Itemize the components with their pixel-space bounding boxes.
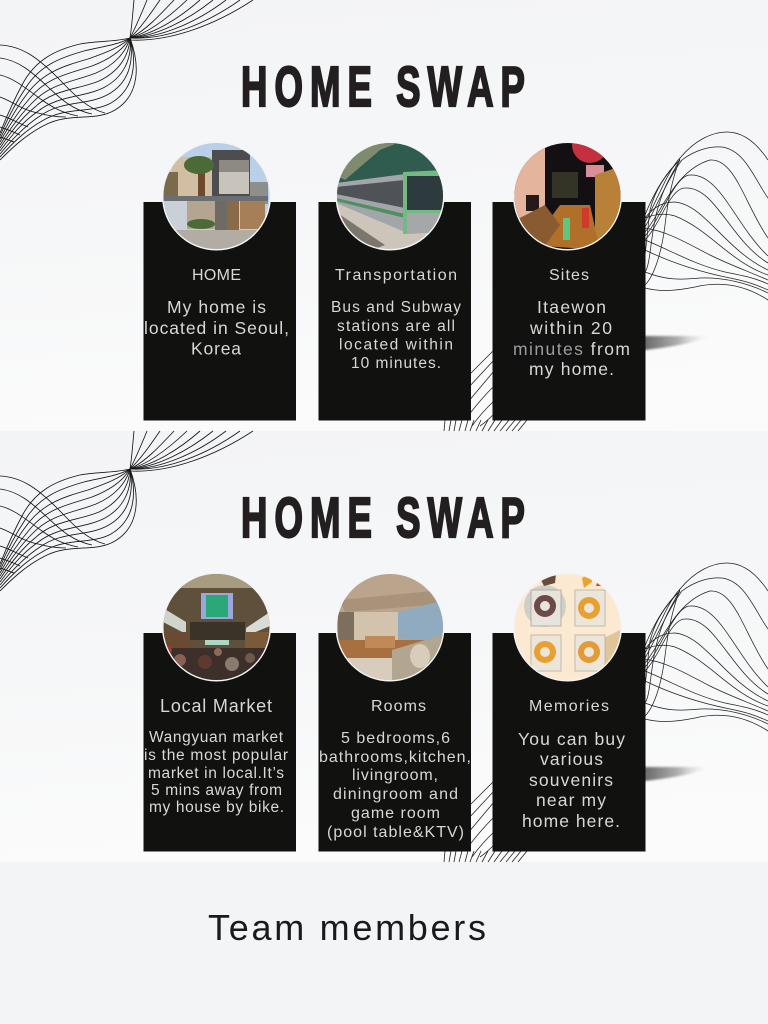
text block: bathrooms,kitchen, [319,749,471,766]
card background [318,633,471,852]
text block: 5 mins away from [151,782,282,799]
text block [331,299,461,372]
text block: Bus and Subway [331,299,461,316]
heading: Local Market [160,696,272,716]
panel: local market [144,570,296,852]
text block: Wangyuan market [149,729,284,746]
text block: home here. [522,811,620,831]
card background [492,633,646,852]
text block [144,729,288,816]
heading: Sites [549,267,589,284]
background: section two [0,431,768,862]
card background [318,202,471,420]
text block [144,297,289,358]
heading: Memories [529,698,609,715]
icon: souvenirs photo [512,570,624,682]
decorative hatching: second [444,781,527,862]
text block: 5 bedrooms,6 [341,730,450,747]
text block: near my [536,790,606,810]
text block: my home. [529,359,614,379]
text block: souvenirs [529,770,613,790]
title: section two: HOME SWAP [241,486,532,550]
text block [518,729,625,831]
heading: Rooms [371,698,426,715]
decorative wave: right [645,132,768,300]
card background [144,202,296,420]
card background [492,202,646,420]
panel: home [144,140,296,420]
heading: team members: Team members [208,907,486,948]
icon: market photo [160,570,275,682]
text block: located within [339,336,453,354]
text block: located in Seoul, [144,318,289,338]
panel: sites [492,127,646,420]
text block: Korea [191,338,241,358]
text block: within 20 [529,318,612,338]
decorative shadow streak [600,336,712,350]
icon: Itaewon street photo [513,143,622,250]
heading: HOME [192,267,241,284]
icon: room photo [335,570,447,682]
text block: My home is [167,297,266,317]
panel: memories [492,570,646,852]
icon: subway train photo [335,140,447,252]
decorative wave: top left [0,0,253,160]
text block [513,297,630,379]
text block: 10 minutes. [351,355,441,372]
text block: stations are all [337,318,455,335]
background: section one [0,0,768,431]
title: section one: HOME SWAP [241,55,532,119]
text block [319,730,471,841]
text block: diningroom and [333,786,458,803]
heading: Transportation [335,267,457,284]
text block: market in local.It’s [148,765,284,782]
shadow overlay across text [512,342,584,359]
text block: Itaewon [537,297,606,317]
text block: minutes from [513,339,630,359]
text block: You can buy [518,729,625,749]
card background [144,633,296,852]
text block: game room [351,805,440,822]
decorative wave: second top left [0,431,253,591]
decorative shadow streak: second [600,767,712,781]
decorative hatching [444,350,527,431]
decorative wave: second right [645,563,768,731]
text block: is the most popular [144,747,288,764]
text block: (pool table&KTV) [327,824,464,841]
icon: house photo [162,143,271,250]
text block: livingroom, [352,767,438,784]
text block: various [540,749,603,769]
panel: transportation [318,140,471,420]
panel: rooms [318,570,471,852]
text block: my house by bike. [149,799,284,816]
